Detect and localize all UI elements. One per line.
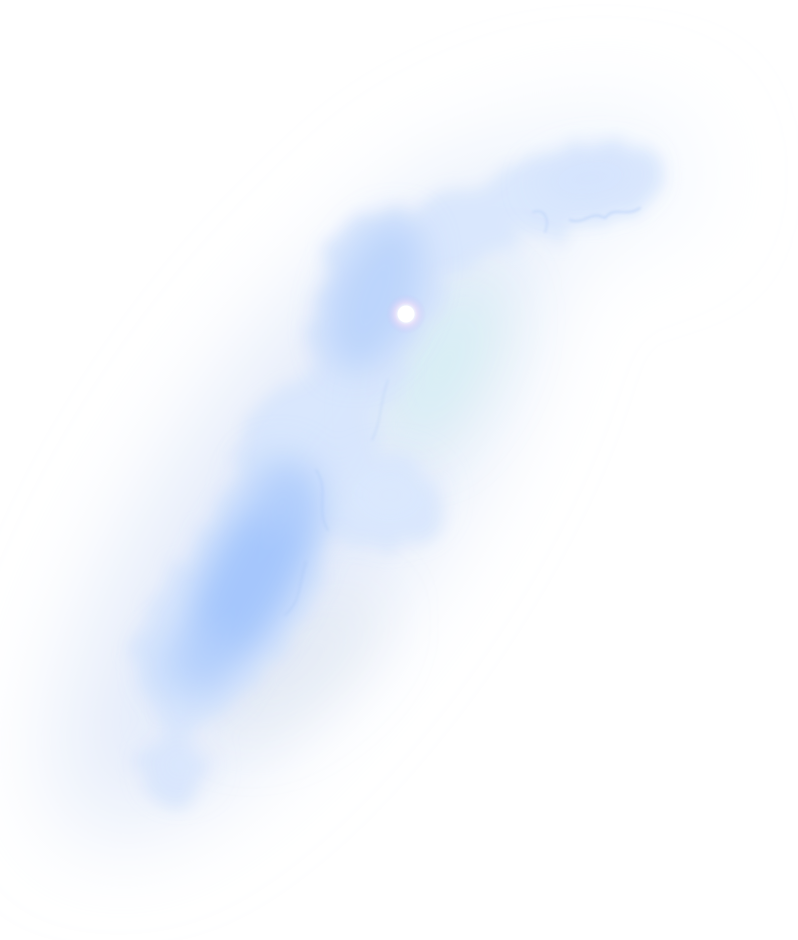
dense blue regions	[153, 147, 648, 789]
outer halo	[0, 76, 695, 901]
green-tinted inner glow	[203, 268, 521, 755]
fine cloud edges	[285, 208, 640, 615]
cloud body	[138, 144, 660, 806]
bright star	[386, 294, 426, 334]
